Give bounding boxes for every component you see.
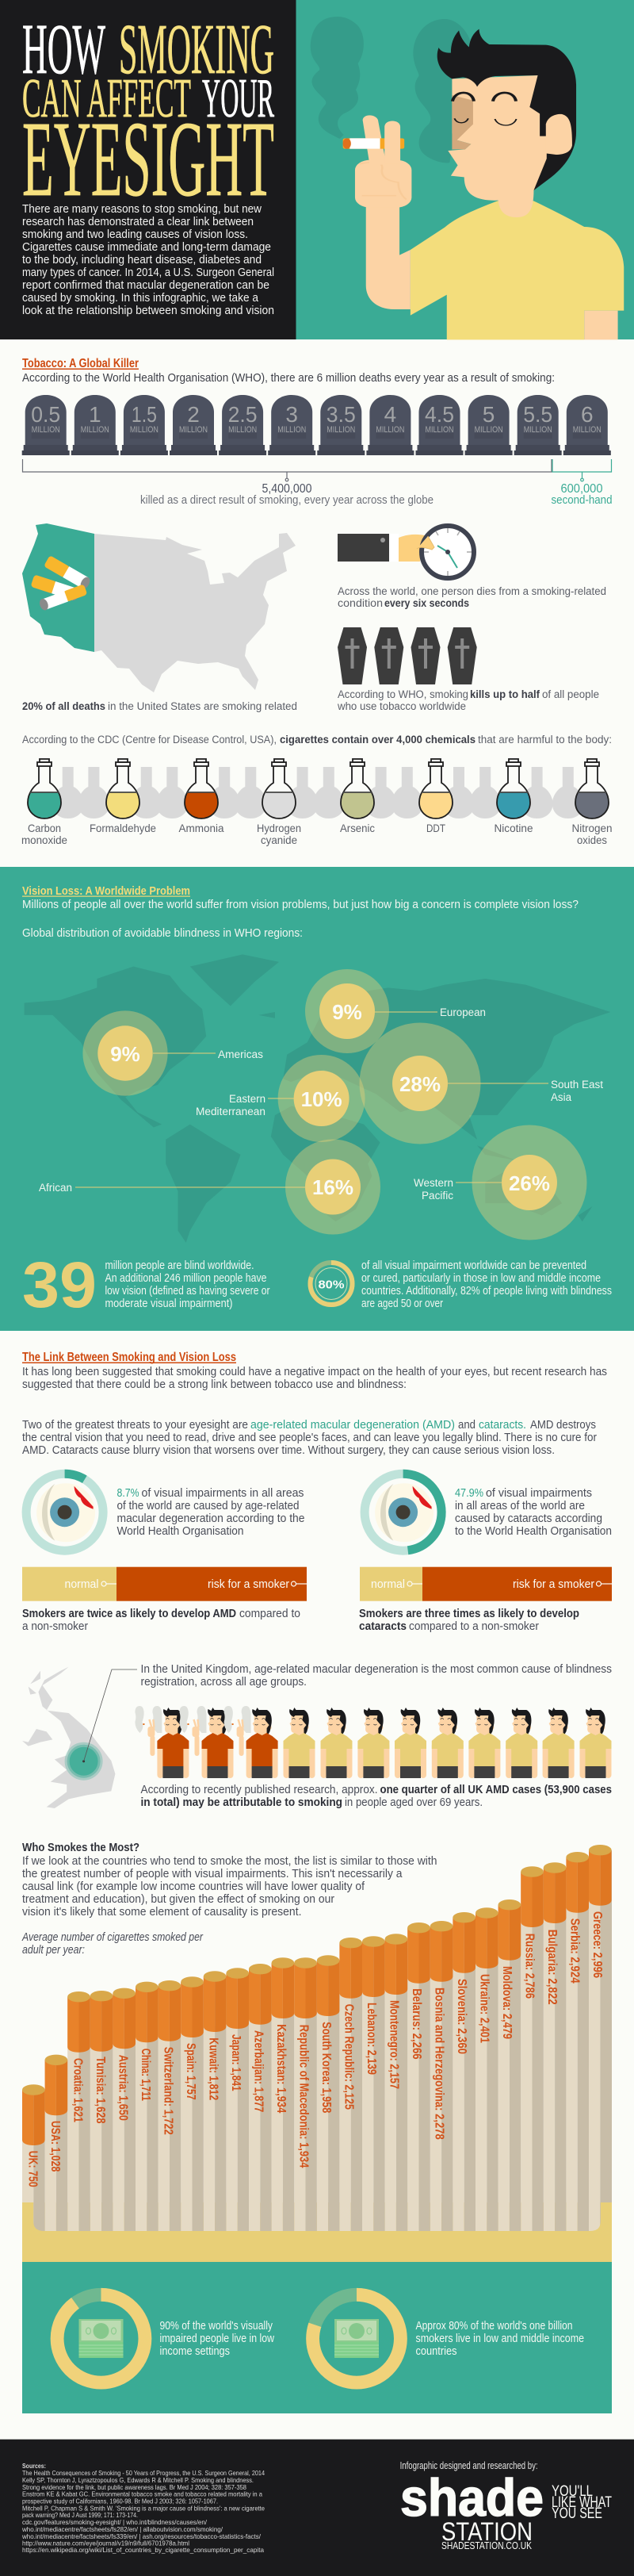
region labels: European <box>440 1006 486 1018</box>
sources: Strong evidence for the link, but public awareness lags. Br Med J 2004; 328: 357-358 <box>22 2483 246 2491</box>
stat: 39 million: low vision (defined as having severe or <box>105 1285 270 1298</box>
sources: pack warning? Med J Aust 1999; 171: 173-174. <box>22 2511 138 2519</box>
region labels <box>39 1006 603 1202</box>
text: two threats <box>22 1419 597 1457</box>
text: UK AMD: registration, across all age groups. <box>141 1676 307 1689</box>
region labels: South East <box>551 1079 603 1091</box>
non-smokers <box>284 1708 612 1778</box>
panel: vision loss <box>0 867 634 1331</box>
text: kills up to half <box>337 688 599 712</box>
country labels: Austria: 1,650 <box>116 2055 130 2121</box>
chart base yellow <box>22 2202 612 2262</box>
country labels: Bosnia and Herzegovina: 2,278 <box>433 1988 445 2140</box>
text: cataracts statistic: 47.9% <box>455 1487 483 1500</box>
flask labels: Ammonia <box>179 822 224 834</box>
text: three times as likely: compared to a non-smoker <box>409 1620 539 1633</box>
text: AMD statistic: of visual impairments in all areas <box>141 1487 304 1500</box>
footer background <box>0 2440 634 2576</box>
intro text: research has demonstrated a clear link between <box>22 216 254 228</box>
country labels: Montenegro: 2,157 <box>387 2000 401 2089</box>
sources: who.int/mediacentre/factsheets/fs339/en/ | ash.org/resources/tobacco-statistics-facts/ <box>21 2532 262 2540</box>
header dark background <box>0 0 296 339</box>
teal background <box>0 867 634 1331</box>
text: kills up to half: kills up to half <box>470 688 540 700</box>
tombstones row: MILLION <box>524 425 552 435</box>
text: 20% of all deaths <box>22 700 297 712</box>
tombstones row: MILLION <box>327 425 355 435</box>
text: two threats: Two of the greatest threats to your eyesight are <box>22 1419 248 1432</box>
label: 600,000: 600,000 <box>561 482 603 496</box>
bubble: Eastern Mediterranean: 10% <box>301 1087 342 1111</box>
text: CDC chemicals <box>22 734 612 746</box>
text: who smokes: causal link (for example low income countries will have lower quality of <box>22 1880 365 1893</box>
text: CDC chemicals: cigarettes contain over 4,000 chemicals <box>280 734 476 746</box>
tombstones row: 6 <box>581 402 594 427</box>
text: 80 percent: smokers live in low and middle income <box>415 2332 584 2345</box>
chart: AMD donut with eye <box>26 1474 103 1551</box>
tombstones row: 4.5 <box>425 402 454 427</box>
text: 90 percent: income settings <box>160 2344 230 2358</box>
bar: cataracts risk: risk for a smoker <box>513 1577 594 1591</box>
shade station logo: STATION <box>441 2517 533 2546</box>
flask labels: Nitrogen <box>572 822 612 834</box>
tombstones row: 3.5 <box>327 402 356 427</box>
intro text: to the body, including heart disease, diabetes and <box>22 254 262 266</box>
cigarette filters <box>22 1845 612 2145</box>
country labels: Lebanon: 2,139 <box>365 2003 378 2075</box>
text: AMD statistic: macular degeneration according to the <box>117 1512 304 1525</box>
text: two threats: cataracts. <box>479 1419 526 1432</box>
intro text: Cigarettes cause immediate and long-term damage <box>22 241 271 254</box>
panel: header: SMOKING <box>119 10 274 89</box>
icon: hand with clock <box>338 526 474 578</box>
tombstones row: MILLION <box>277 425 306 435</box>
shade station logo <box>400 2468 612 2551</box>
sources: http://www.nature.com/eye/journal/v19/n9/full/6701978a.html <box>22 2540 189 2547</box>
text: 80 percent: countries <box>415 2344 456 2358</box>
tombstones row: MILLION <box>179 425 208 435</box>
title <box>22 10 274 219</box>
text: kills up to half: of all people <box>542 688 599 700</box>
stat: 80 percent <box>311 1259 612 1310</box>
bar: AMD risk <box>22 1567 307 1601</box>
donut: 90 percent <box>57 2294 145 2382</box>
country labels: Slovenia: 2,360 <box>455 1979 468 2054</box>
text: kills up to half: According to WHO, smoking <box>338 688 468 700</box>
country labels: Croatia: 1,621 <box>71 2058 84 2122</box>
flask: DDT <box>419 759 453 818</box>
text: two threats: AMD. Cataracts cause blurry vision that worsens over time. Without surgery, they can cause serious vision loss. <box>22 1444 555 1457</box>
text: one quarter: in total) may be attributable to smoking <box>141 1796 342 1809</box>
text: two threats: the central vision that you need to read, drive and see people's faces, and can leave you legally blind. There is no cure for <box>22 1432 597 1444</box>
intro text: many types of cancer. In 2014, a U.S. Surgeon General <box>22 266 274 279</box>
text: every six seconds: condition <box>338 597 383 609</box>
text: one quarter: in people aged over 69 years. <box>345 1796 483 1809</box>
text: one quarter: one quarter of all UK AMD cases (53,900 cases <box>380 1784 612 1796</box>
stat: 39 million <box>22 1249 270 1321</box>
stat: 39 million: moderate visual impairment) <box>105 1298 233 1310</box>
text: two threats: age-related macular degeneration (AMD) <box>250 1419 455 1432</box>
stat: 80 percent: or cured, particularly in those in low and middle income <box>361 1272 601 1285</box>
subheading: Global distribution of avoidable blindness in WHO regions: <box>22 927 303 940</box>
flask labels: Carbon <box>28 822 61 834</box>
text: one quarter <box>141 1784 612 1809</box>
sources: who.int/mediacentre/factsheets/fs282/en/ | allaboutvision.com/smoking/ <box>21 2525 223 2533</box>
text: 90 percent: 90% of the world's visually <box>160 2319 273 2333</box>
country labels: China: 1,711 <box>139 2049 152 2101</box>
region labels: Mediterranean <box>196 1106 265 1117</box>
tombstones row: 2 <box>187 402 200 427</box>
intro text: suggested that there could be a strong link between tobacco use and blindness: <box>22 1378 407 1391</box>
text: kills up to half: who use tobacco worldwide <box>337 700 466 712</box>
flask labels: Formaldehyde <box>90 822 156 834</box>
tombstones row: MILLION <box>32 425 60 435</box>
flask: carbon monoxide <box>28 759 61 818</box>
flask: hydrogen cyanide <box>262 759 296 818</box>
world map <box>25 954 610 1243</box>
intro text: It has long been suggested that smoking could have a negative impact on the health of your eyes, but recent research has <box>22 1366 607 1378</box>
tombstones row: MILLION <box>376 425 404 435</box>
text: three times as likely: Smokers are three times as likely to develop <box>359 1608 579 1620</box>
tombstones row: MILLION <box>81 425 109 435</box>
country labels: Ukraine: 2,401 <box>477 1974 491 2043</box>
sources: Enstrom KE & Kabat GC. Environmental tobacco smoke and tobacco related mortality in a <box>22 2490 262 2498</box>
country labels: Greece: 2,996 <box>590 1911 604 1978</box>
country labels: Kazakhstan: 1,934 <box>274 2024 288 2114</box>
flask: arsenic <box>341 759 374 818</box>
text: CDC chemicals: According to the CDC (Centre for Disease Control, USA), <box>22 734 277 746</box>
US map <box>22 523 296 698</box>
tombstones row: 2.5 <box>228 402 258 427</box>
tombstones row <box>22 395 611 455</box>
region labels: Western <box>414 1177 453 1189</box>
text: who smokes: the greatest number of people with visual impairments. This isn't necessarily a <box>22 1868 403 1880</box>
sources: The Health Consequences of Smoking - 50 Years of Progress, the U.S. Surgeon General, 2014 <box>22 2469 265 2477</box>
bar: cataracts risk <box>360 1567 612 1601</box>
tombstones row: 3 <box>285 402 298 427</box>
text: cataracts statistic: in all areas of the world are <box>455 1500 585 1512</box>
country labels: Switzerland: 1,722 <box>162 2047 174 2135</box>
text: cataracts statistic <box>455 1487 612 1538</box>
text: three times as likely <box>359 1608 579 1633</box>
country labels: Spain: 1,757 <box>184 2043 197 2100</box>
title: CAN AFFECT <box>22 68 191 129</box>
sources: Kelly SP, Thornton J, Lyraztzopoulos G, Edwards R & Mitchell P. Smoking and blindness. <box>22 2476 254 2484</box>
sources: cdc.gov/features/smoking-eyesight/ | who.int/blindness/causes/en/ <box>22 2518 208 2526</box>
heading: The Link Between Smoking and Vision Loss <box>22 1351 236 1364</box>
bubble: European <box>305 969 389 1053</box>
bubble: Western Pacific: 26% <box>509 1171 550 1195</box>
text: cataracts statistic: caused by cataracts according <box>455 1512 602 1525</box>
label: 5,400,000 <box>140 482 433 507</box>
panel: header <box>0 0 634 339</box>
country labels: Moldova: 2,479 <box>500 1966 514 2039</box>
country labels: Azerbaijan: 1,877 <box>252 2030 265 2112</box>
intro text: look at the relationship between smoking and vision <box>22 305 274 317</box>
text: cataracts statistic: to the World Health Organisation <box>455 1525 612 1538</box>
bubble: African <box>285 1139 380 1234</box>
country labels: UK: 750 <box>25 2151 40 2187</box>
panel: header: EYESIGHT <box>22 100 274 219</box>
text: twice as likely: Smokers are twice as likely to develop AMD <box>22 1608 236 1620</box>
text: UK AMD <box>141 1663 612 1689</box>
flask: nicotine <box>497 759 530 818</box>
flask: formaldehyde <box>106 759 139 818</box>
flask shadows <box>52 767 584 818</box>
icon: coffins <box>338 627 477 684</box>
country labels: Japan: 1,841 <box>229 2034 243 2091</box>
country labels: Kuwait: 1,812 <box>206 2037 220 2100</box>
stat: 39 million: An additional 246 million people have <box>105 1272 266 1285</box>
text: AMD statistic <box>117 1487 304 1538</box>
bracket: 5,400,000 <box>22 459 552 481</box>
credit line: Infographic designed and researched by: <box>400 2460 538 2471</box>
country labels: Bulgaria: 2,822 <box>545 1930 559 2005</box>
chart caption: adult per year: <box>22 1944 85 1957</box>
region labels: Americas <box>218 1048 263 1060</box>
text: twice as likely <box>22 1608 300 1633</box>
title: HOW <box>22 10 105 89</box>
text: two threats: AMD destroys <box>530 1419 596 1432</box>
UK map <box>22 1667 137 1808</box>
country labels: Belarus: 2,266 <box>410 1988 423 2060</box>
flask labels: oxides <box>577 834 607 846</box>
country labels <box>25 1911 604 2187</box>
intro text: There are many reasons to stop smoking, but new <box>22 203 262 216</box>
country labels: Russia: 2,786 <box>523 1934 536 1999</box>
text: 80 percent: Approx 80% of the world's one billion <box>415 2319 572 2333</box>
flask labels: Arsenic <box>340 822 375 834</box>
cigarette columns <box>22 1850 612 2237</box>
chart: chemical flasks <box>21 759 612 846</box>
bar: AMD risk: risk for a smoker <box>208 1577 289 1591</box>
bubble: Eastern Mediterranean <box>278 1055 365 1142</box>
smokers <box>135 1706 278 1778</box>
text: who smokes: vision it's likely that some element of causality is present. <box>22 1906 301 1919</box>
intro text <box>22 1366 607 1391</box>
label: 5,400,000: 5,400,000 <box>262 482 312 496</box>
text: 90 percent <box>160 2319 274 2358</box>
tombstones row: MILLION <box>425 425 454 435</box>
intro text: Millions of people all over the world suffer from vision problems, but just how big a concern is complete vision loss? <box>22 899 579 911</box>
region labels: Pacific <box>422 1190 453 1202</box>
region labels: Eastern <box>229 1093 265 1105</box>
bubble: South East Asia <box>360 1023 480 1144</box>
tombstones row: 4 <box>384 402 396 427</box>
sources: prospective study of Californians, 1960-98. Br Med J 2003; 326: 1057-1067. <box>22 2497 218 2505</box>
bar: AMD risk: normal <box>65 1577 98 1591</box>
chart caption <box>21 1931 204 1957</box>
country labels: Tunisia: 1,628 <box>94 2057 107 2124</box>
text: 20% of all deaths: in the United States are smoking related <box>108 700 297 712</box>
stat: 39 million: million people are blind worldwide. <box>105 1259 254 1272</box>
text: twice as likely: compared to <box>239 1608 300 1620</box>
text: every six seconds <box>338 585 606 609</box>
shade station logo: YOU'LL <box>552 2483 593 2500</box>
text: three times as likely: cataracts <box>359 1620 407 1633</box>
text: 90 percent: impaired people live in low <box>160 2332 274 2345</box>
cigarettes on map <box>31 555 92 611</box>
text: AMD statistic: World Health Organisation <box>117 1525 244 1538</box>
text: twice as likely: a non-smoker <box>22 1620 88 1633</box>
teal panel background <box>22 2262 612 2413</box>
shade station logo: SHADESTATION.CO.UK <box>441 2540 532 2551</box>
flask labels: Nicotine <box>495 822 533 834</box>
tombstones row: 5 <box>483 402 495 427</box>
heading: who smokes the most: Who Smokes the Most? <box>22 1842 139 1854</box>
text: one quarter: According to recently published research, approx. <box>141 1784 377 1796</box>
stat: 80 percent: are aged 50 or over <box>361 1298 443 1310</box>
panel: the link between smoking and vision loss <box>21 1351 612 2413</box>
panel: tobacco a global killer <box>21 357 612 846</box>
region labels: Asia <box>551 1091 571 1103</box>
text: who smokes <box>22 1855 437 1919</box>
tombstones row: MILLION <box>475 425 503 435</box>
text: AMD statistic: of the world are caused by age-related <box>117 1500 300 1512</box>
text: two threats: and <box>458 1419 476 1432</box>
sources <box>21 2462 265 2554</box>
tombstones row: MILLION <box>573 425 602 435</box>
tombstones row: 1 <box>89 402 101 427</box>
flask labels: cyanide <box>261 834 297 846</box>
country labels: Republic of Macedonia: 1,934 <box>296 2025 311 2168</box>
shade station logo: shade <box>400 2468 544 2527</box>
pictogram: people row <box>135 1706 611 1778</box>
text: 80 percent <box>415 2319 584 2358</box>
flask labels: Hydrogen <box>257 822 301 834</box>
stat: 80 percent: of all visual impairment worldwide can be prevented <box>361 1259 586 1272</box>
label: 5,400,000: killed as a direct result of smoking, every year across the globe <box>140 493 433 507</box>
bar: cataracts risk: normal <box>371 1577 405 1591</box>
country labels: Serbia: 2,924 <box>567 1919 582 1984</box>
intro text: report confirmed that macular degeneration can be <box>22 279 269 292</box>
heading: Vision Loss: A Worldwide Problem <box>22 884 190 898</box>
stat: 80 percent: 80% <box>319 1278 344 1291</box>
sources: https://en.wikipedia.org/wiki/List_of_countries_by_cigarette_consumption_per_capita <box>22 2546 264 2554</box>
text: UK AMD: In the United Kingdom, age-related macular degeneration is the most common cause of blindness <box>141 1663 612 1676</box>
bubble: European: 9% <box>332 1000 362 1024</box>
panel: low income <box>22 2262 612 2413</box>
sources: Sources: <box>22 2462 46 2470</box>
text: who smokes: If we look at the countries who tend to smoke the most, the list is similar to those with <box>22 1855 437 1868</box>
bubble: African: 16% <box>312 1175 353 1199</box>
shade station logo: YOU SEE <box>552 2505 602 2522</box>
country labels: Czech Republic: 2,125 <box>342 2004 355 2110</box>
header teal background <box>296 0 634 339</box>
tombstones row: 0.5 <box>31 402 60 427</box>
tombstones row: 5.5 <box>523 402 552 427</box>
flask labels: monoxide <box>21 834 67 846</box>
intro text: smoking and two leading causes of vision loss. <box>22 228 248 241</box>
shade station logo: LIKE WHAT <box>552 2494 612 2511</box>
panel: footer <box>0 2440 634 2576</box>
text: CDC chemicals: that are harmful to the body: <box>478 734 612 746</box>
label: 600,000: second-hand <box>552 493 612 507</box>
bubble: Western Pacific <box>472 1125 586 1240</box>
flask: ammonia <box>185 759 218 818</box>
text: every six seconds: Across the world, one person dies from a smoking-related <box>338 585 606 597</box>
chart caption: Average number of cigarettes smoked per <box>21 1931 204 1944</box>
chart: cigarettes per adult <box>22 1845 612 2262</box>
text: cataracts statistic: of visual impairments <box>486 1487 592 1500</box>
flask: nitrogen oxides <box>575 759 609 818</box>
country labels: South Korea: 1,958 <box>319 2022 333 2114</box>
region labels: African <box>39 1182 72 1194</box>
bubble: South East Asia: 28% <box>399 1072 441 1096</box>
sources: Mitchell P, Chapman S & Smith W. 'Smoking is a major cause of blindness': a new cigarette <box>22 2505 265 2513</box>
panel: header: YOUR <box>202 68 274 129</box>
intro text: caused by smoking. In this infographic, we take a <box>22 292 259 305</box>
label: 600,000 <box>552 482 612 507</box>
intro text <box>22 203 274 317</box>
bracket: 600,000 <box>552 459 612 481</box>
text: who smokes: treatment and education), but given the effect of smoking on our <box>22 1893 334 1906</box>
tombstones row: 1.5 <box>132 402 157 427</box>
text: 20% of all deaths: 20% of all deaths <box>22 700 105 712</box>
flask labels: DDT <box>426 822 445 834</box>
country labels: USA: 1,028 <box>48 2121 62 2172</box>
tombstones row: MILLION <box>130 425 158 435</box>
text: every six seconds: every six seconds <box>384 597 469 609</box>
bubble: Americas: 9% <box>110 1042 140 1066</box>
flask labels <box>21 822 612 846</box>
heading: Tobacco: A Global Killer <box>22 357 139 370</box>
bubble: Americas <box>82 1010 168 1096</box>
stat: 39 million: 39 <box>22 1249 97 1321</box>
text: AMD statistic: 8.7% <box>117 1487 139 1500</box>
donut: 80 percent <box>313 2294 400 2382</box>
illustration: smoking man <box>311 17 624 339</box>
tombstones row: MILLION <box>228 425 257 435</box>
intro sentence: According to the World Health Organisation (WHO), there are 6 million deaths every year as a result of smoking: <box>22 372 555 385</box>
chart: cataracts donut with eye <box>365 1474 441 1551</box>
